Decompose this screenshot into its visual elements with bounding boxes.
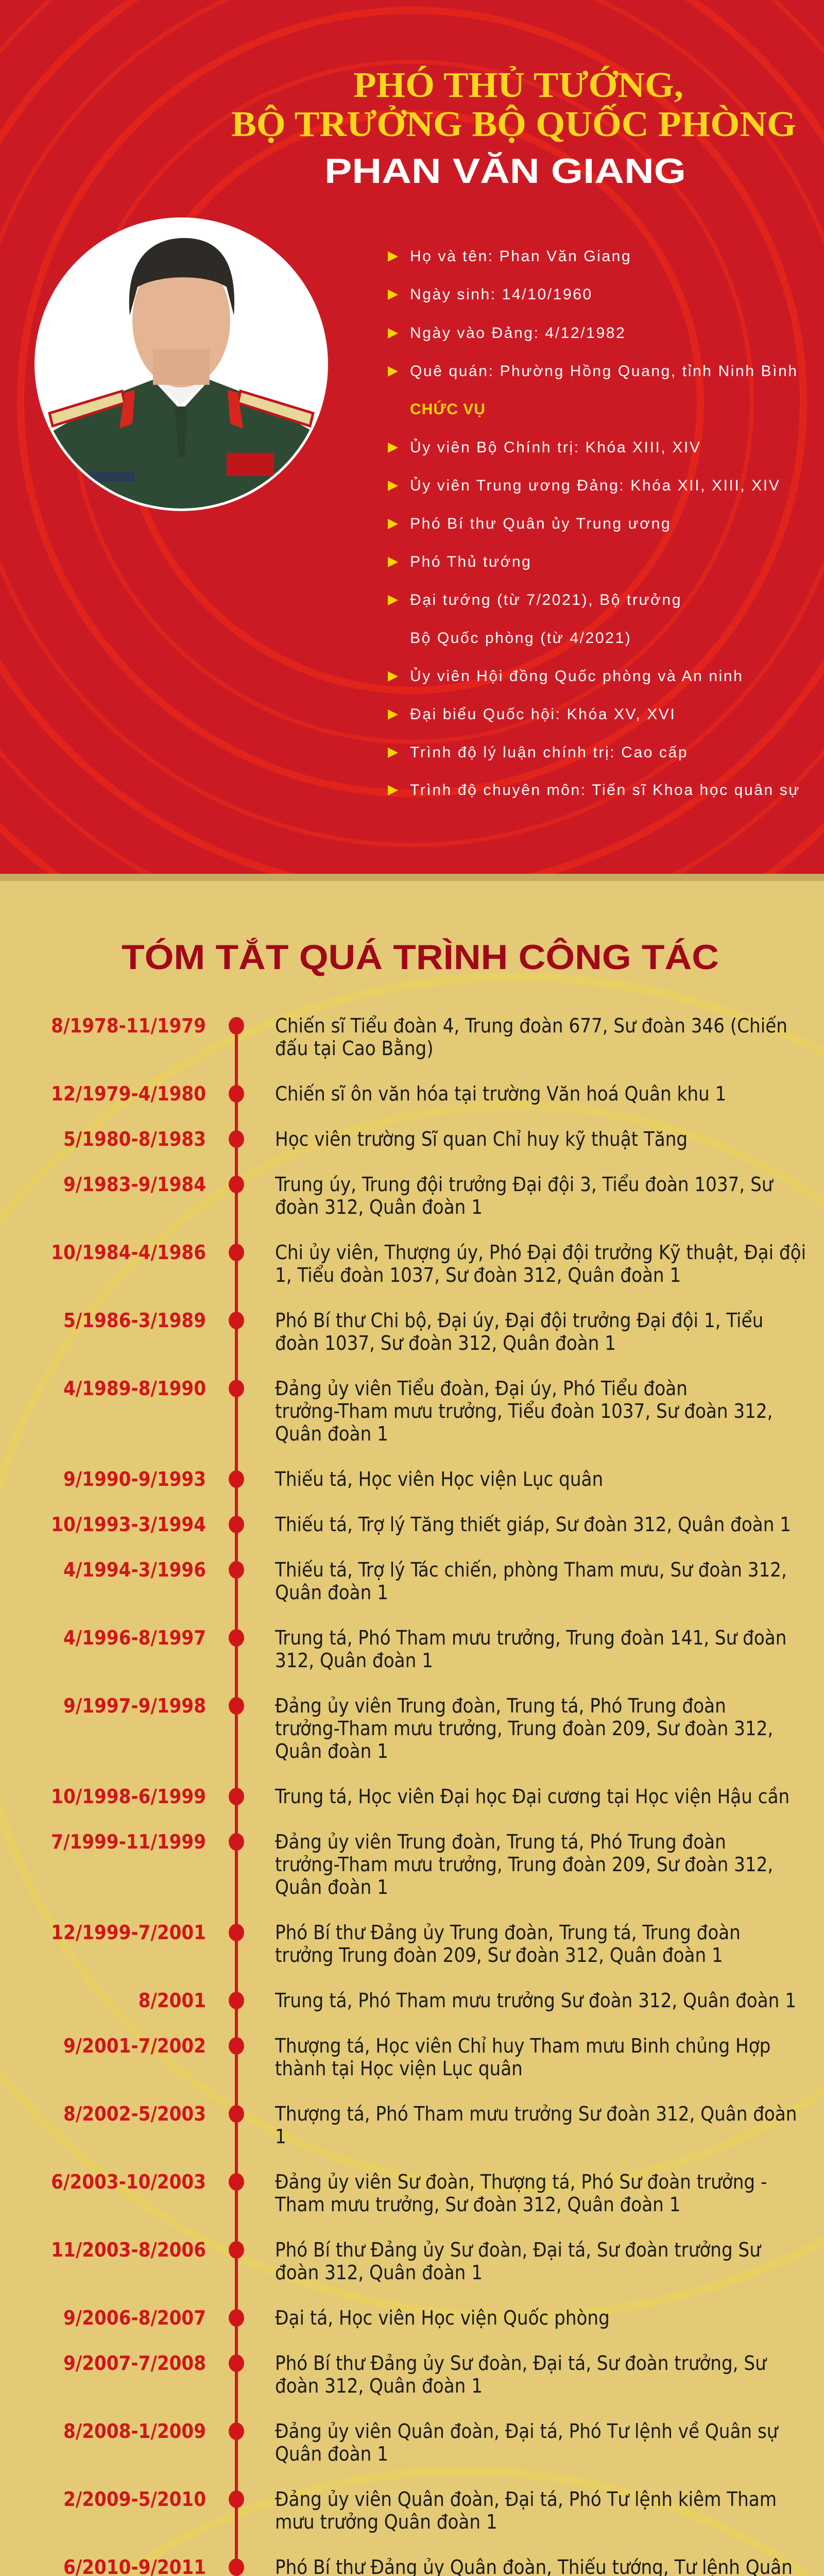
timeline entries: Phó Bí thư Chi bộ, Đại úy, Đại đội trưởng Đại đội 1, Tiểu [275, 1309, 763, 1332]
timeline entries: Đảng ủy viên Trung đoàn, Trung tá, Phó Trung đoàn [275, 1831, 726, 1853]
timeline entries: đoàn 312, Quân đoàn 1 [275, 1196, 483, 1218]
timeline entries: Thượng tá, Học viên Chỉ huy Tham mưu Binh chủng Hợp [275, 2035, 770, 2057]
timeline entries: Trung tá, Phó Tham mưu trưởng Sư đoàn 312, Quân đoàn 1 [275, 1989, 796, 2012]
timeline entries: Thiếu tá, Trợ lý Tăng thiết giáp, Sư đoàn 312, Quân đoàn 1 [275, 1513, 791, 1536]
timeline entries: 9/1983-9/1984 [63, 1173, 206, 1196]
timeline entries: 8/2008-1/2009 [63, 2420, 206, 2443]
timeline entries: Đảng ủy viên Quân đoàn, Đại tá, Phó Tư lệnh về Quân sự [275, 2420, 778, 2443]
timeline entries: 7/1999-11/1999 [51, 1831, 206, 1853]
timeline entries: 6/2003-10/2003 [51, 2171, 206, 2193]
timeline entries: Học viên trường Sĩ quan Chỉ huy kỹ thuật Tăng [275, 1128, 688, 1150]
personal info list: Trình độ lý luận chính trị: Cao cấp [410, 744, 688, 761]
timeline entries: Đảng ủy viên Trung đoàn, Trung tá, Phó Trung đoàn [275, 1694, 726, 1717]
personal info list [388, 248, 800, 799]
personal info list: Ủy viên Hội đồng Quốc phòng và An ninh [410, 668, 744, 685]
timeline entries: 9/2006-8/2007 [63, 2307, 206, 2329]
personal info list: Ngày vào Đảng: 4/12/1982 [410, 325, 626, 342]
timeline entries: Đảng ủy viên Tiểu đoàn, Đại úy, Phó Tiểu đoàn [275, 1377, 688, 1400]
timeline entries: Phó Bí thư Đảng ủy Sư đoàn, Đại tá, Sư đoàn trưởng Sư [275, 2239, 761, 2261]
header panel [0, 0, 824, 874]
title: PHÓ THỦ TƯỚNG, [353, 65, 683, 105]
timeline entries: mưu trưởng Quân đoàn 1 [275, 2511, 497, 2533]
timeline entries: 12/1979-4/1980 [51, 1082, 206, 1105]
timeline entries: Trung úy, Trung đội trưởng Đại đội 3, Tiểu đoàn 1037, Sư [275, 1173, 772, 1196]
timeline entries: 11/2003-8/2006 [51, 2239, 206, 2261]
timeline entries: Chiến sĩ Tiểu đoàn 4, Trung đoàn 677, Sư đoàn 346 (Chiến [275, 1014, 787, 1037]
timeline entries: 4/1996-8/1997 [63, 1626, 206, 1649]
timeline entries: 1, Tiểu đoàn 1037, Sư đoàn 312, Quân đoàn 1 [275, 1264, 681, 1286]
timeline entries: Thiếu tá, Học viên Học viện Lục quân [275, 1468, 603, 1490]
timeline entries: 8/2002-5/2003 [63, 2103, 206, 2125]
personal info list: Phó Thủ tướng [410, 553, 531, 570]
timeline entries: Đảng ủy viên Sư đoàn, Thượng tá, Phó Sư đoàn trưởng - [275, 2171, 767, 2193]
personal info list: Họ và tên: Phan Văn Giang [410, 248, 631, 265]
title [231, 65, 796, 191]
timeline entries: Thượng tá, Phó Tham mưu trưởng Sư đoàn 312, Quân đoàn [275, 2103, 797, 2125]
title: BỘ TRƯỞNG BỘ QUỐC PHÒNG [231, 104, 796, 144]
timeline entries: trưởng-Tham mưu trưởng, Tiểu đoàn 1037, Sư đoàn 312, [275, 1400, 773, 1422]
timeline entries: Chiến sĩ ôn văn hóa tại trường Văn hoá Quân khu 1 [275, 1082, 726, 1105]
decorative pattern [0, 0, 824, 874]
timeline entries: Đại tá, Học viên Học viện Quốc phòng [275, 2307, 610, 2329]
timeline entries: Quân đoàn 1 [275, 1740, 388, 1762]
title: PHAN VĂN GIANG [324, 151, 686, 191]
timeline entries: đấu tại Cao Bằng) [275, 1037, 434, 1060]
timeline entries: trưởng-Tham mưu trưởng, Trung đoàn 209, Sư đoàn 312, [275, 1717, 773, 1740]
timeline entries: trưởng-Tham mưu trưởng, Trung đoàn 209, Sư đoàn 312, [275, 1853, 773, 1876]
timeline entries: 5/1986-3/1989 [63, 1309, 206, 1332]
personal info list: Đại biểu Quốc hội: Khóa XV, XVI [410, 706, 676, 723]
timeline entries: Quân đoàn 1 [275, 1876, 388, 1899]
timeline entries: 10/1993-3/1994 [51, 1513, 206, 1536]
timeline entries: 2/2009-5/2010 [63, 2488, 206, 2511]
timeline entries: 8/2001 [139, 1989, 206, 2012]
personal info list: Ủy viên Trung ương Đảng: Khóa XII, XIII, XIV [410, 477, 780, 494]
personal info list: Ngày sinh: 14/10/1960 [410, 286, 593, 303]
timeline entries: Quân đoàn 1 [275, 1422, 388, 1445]
timeline entries: 10/1998-6/1999 [51, 1785, 206, 1808]
timeline entries: 9/1990-9/1993 [63, 1468, 206, 1490]
timeline entries: Phó Bí thư Đảng ủy Sư đoàn, Đại tá, Sư đoàn trưởng, Sư [275, 2352, 766, 2375]
timeline entries: 12/1999-7/2001 [51, 1921, 206, 1944]
timeline entries: 1 [275, 2125, 286, 2148]
timeline entries: Thiếu tá, Trợ lý Tác chiến, phòng Tham mưu, Sư đoàn 312, [275, 1558, 787, 1581]
timeline entries: 9/2007-7/2008 [63, 2352, 206, 2375]
timeline entries: 8/1978-11/1979 [51, 1014, 206, 1037]
timeline entries: 5/1980-8/1983 [63, 1128, 206, 1150]
timeline entries: Tham mưu trưởng, Sư đoàn 312, Quân đoàn 1 [275, 2193, 680, 2216]
timeline entries: Quân đoàn 1 [275, 1581, 388, 1604]
timeline entries: 9/2001-7/2002 [63, 2035, 206, 2057]
timeline entries: Phó Bí thư Đảng ủy Trung đoàn, Trung tá, Trung đoàn [275, 1921, 741, 1944]
personal info list: CHỨC VỤ [410, 401, 486, 418]
personal info list: Ủy viên Bộ Chính trị: Khóa XIII, XIV [410, 439, 701, 456]
section heading: TÓM TẮT QUÁ TRÌNH CÔNG TÁC [122, 937, 719, 977]
personal info list: Bộ Quốc phòng (từ 4/2021) [410, 630, 631, 647]
timeline entries: trưởng Trung đoàn 209, Sư đoàn 312, Quân đoàn 1 [275, 1944, 723, 1967]
timeline entries: 4/1994-3/1996 [63, 1558, 206, 1581]
portrait [35, 217, 328, 511]
personal info list: Trình độ chuyên môn: Tiến sĩ Khoa học quân sự [410, 782, 800, 799]
timeline entries: đoàn 312, Quân đoàn 1 [275, 2261, 483, 2284]
timeline line [235, 1026, 238, 2576]
timeline entries: đoàn 1037, Sư đoàn 312, Quân đoàn 1 [275, 1332, 616, 1354]
timeline entries: thành tại Học viện Lục quân [275, 2057, 523, 2080]
personal info list: Đại tướng (từ 7/2021), Bộ trưởng [410, 591, 682, 608]
gold decorative pattern [0, 874, 824, 2576]
timeline entries: 10/1984-4/1986 [51, 1241, 206, 1264]
timeline entries: Quân đoàn 1 [275, 2443, 388, 2465]
timeline entries: Trung tá, Phó Tham mưu trưởng, Trung đoàn 141, Sư đoàn [275, 1626, 786, 1649]
timeline entries: 312, Quân đoàn 1 [275, 1649, 433, 1672]
timeline entries [51, 1014, 806, 2576]
timeline entries: Trung tá, Học viên Đại học Đại cương tại Học viện Hậu cần [275, 1785, 789, 1808]
personal info list: Quê quán: Phường Hồng Quang, tỉnh Ninh Bình [410, 363, 798, 380]
timeline entries: 9/1997-9/1998 [63, 1694, 206, 1717]
timeline entries: Chi ủy viên, Thượng úy, Phó Đại đội trưởng Kỹ thuật, Đại đội [275, 1241, 806, 1264]
personal info list: Phó Bí thư Quân ủy Trung ương [410, 515, 671, 532]
timeline entries: đoàn 312, Quân đoàn 1 [275, 2375, 483, 2397]
timeline entries: Đảng ủy viên Quân đoàn, Đại tá, Phó Tư lệnh kiêm Tham [275, 2488, 777, 2511]
timeline entries: 4/1989-8/1990 [63, 1377, 206, 1400]
